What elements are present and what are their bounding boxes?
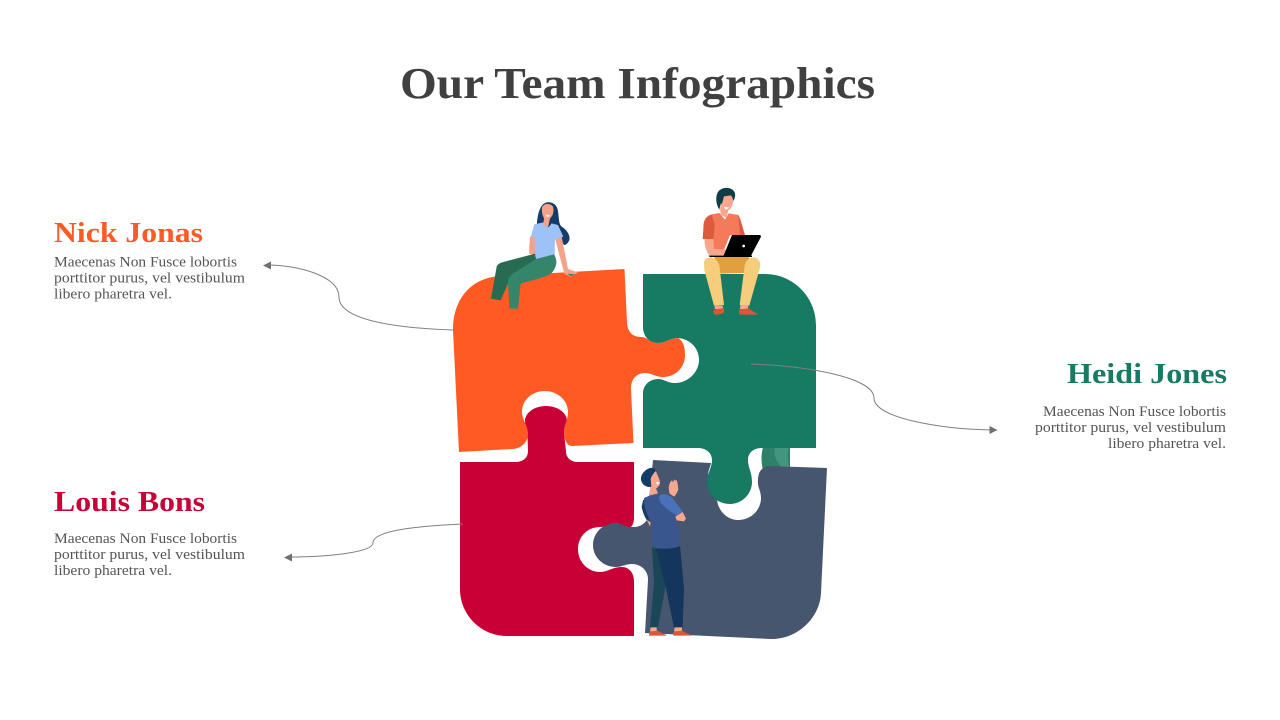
block: Nick Jonas: Maecenas Non Fusce lobortis	[54, 254, 237, 270]
block: Louis Bons	[54, 486, 246, 579]
block: Nick Jonas	[54, 217, 246, 302]
figure: man with laptop	[703, 188, 761, 315]
block: Heidi Jones	[1035, 358, 1227, 452]
block: Nick Jonas: Nick Jonas	[54, 217, 203, 249]
puzzle piece: green	[643, 274, 816, 504]
block: Louis Bons: porttitor purus, vel vestibulum	[54, 547, 246, 563]
puzzle piece: red	[460, 406, 634, 636]
block: Heidi Jones: porttitor purus, vel vestibulum	[1035, 420, 1227, 436]
title: Our Team Infographics	[400, 59, 875, 108]
puzzle piece: navy	[593, 460, 827, 639]
connector: Heidi Jones	[751, 364, 998, 434]
connector: Louis Bons	[284, 524, 463, 562]
puzzle piece: orange	[453, 269, 685, 452]
block: Louis Bons: Maecenas Non Fusce lobortis	[54, 531, 237, 547]
block: Heidi Jones: Maecenas Non Fusce lobortis	[1043, 404, 1226, 420]
block: Heidi Jones: libero pharetra vel.	[1108, 436, 1226, 452]
block: Louis Bons: libero pharetra vel.	[54, 563, 172, 579]
block: Nick Jonas: porttitor purus, vel vestibulum	[54, 270, 246, 286]
block: Louis Bons: Louis Bons	[54, 486, 205, 518]
figure: man looking up	[641, 468, 692, 636]
connector: Nick Jonas	[263, 262, 453, 330]
figure: woman sitting	[491, 202, 578, 309]
block: Nick Jonas: libero pharetra vel.	[54, 286, 172, 302]
block: Heidi Jones: Heidi Jones	[1067, 358, 1227, 390]
puzzle graphic	[453, 269, 827, 639]
puzzle piece: green tab behind navy	[762, 447, 790, 470]
